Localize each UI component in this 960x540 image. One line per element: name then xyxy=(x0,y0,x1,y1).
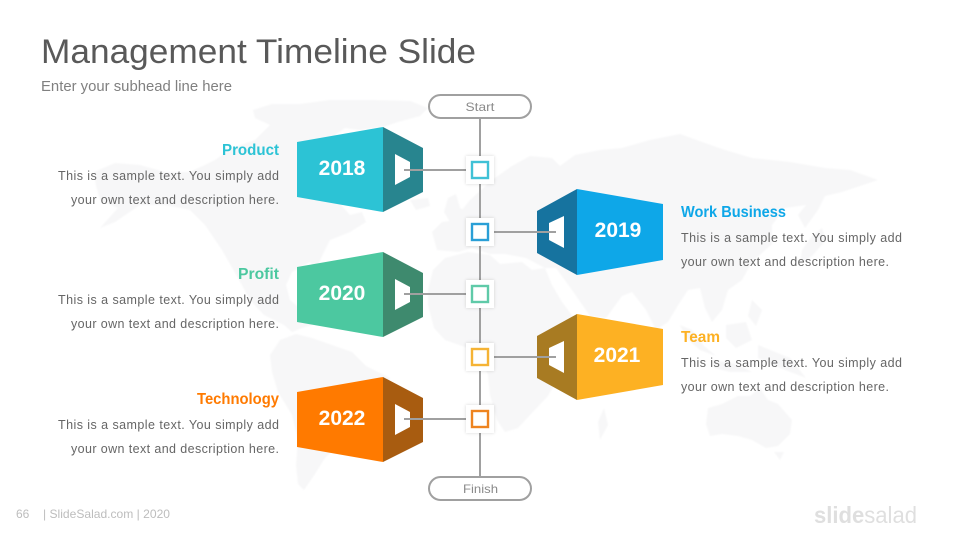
marker 2020 xyxy=(466,280,494,308)
finish pill xyxy=(429,477,531,500)
connector 2019 xyxy=(494,231,556,233)
text: Work Business: This is a sample text. You simply add xyxy=(681,231,902,245)
block 2020 xyxy=(297,252,423,337)
marker 2021 xyxy=(466,343,494,371)
text: Work Business: your own text and description here. xyxy=(681,255,889,269)
text: Profit: This is a sample text. You simply add xyxy=(58,293,279,307)
start pill: Start xyxy=(466,100,495,114)
text: Profit xyxy=(58,266,279,331)
text: Team xyxy=(681,329,902,394)
block 2022: 2022 xyxy=(319,407,365,430)
text: Team: This is a sample text. You simply add xyxy=(681,356,902,370)
text: Technology: This is a sample text. You simply add xyxy=(58,418,279,432)
subhead: Enter your subhead line here xyxy=(41,78,232,95)
marker 2019 xyxy=(466,218,494,246)
connector 2018 xyxy=(404,169,466,171)
title: Management Timeline Slide xyxy=(41,33,476,71)
milestone 2020: Profit xyxy=(58,252,494,337)
block 2021 xyxy=(537,314,663,400)
block 2019 xyxy=(537,189,663,275)
text: Team: your own text and description here. xyxy=(681,380,889,394)
footer page number and credit: 66 xyxy=(16,507,30,521)
marker 2022 xyxy=(466,405,494,433)
text: Technology xyxy=(58,391,279,456)
connector 2021 xyxy=(494,356,556,358)
connector 2020 xyxy=(404,293,466,295)
text: Profit: your own text and description here. xyxy=(71,317,279,331)
finish pill: Finish xyxy=(463,482,498,496)
text: Product: This is a sample text. You simply add xyxy=(58,169,279,183)
milestone 2018: Product xyxy=(58,127,494,212)
text: Team: Team xyxy=(681,329,720,346)
start pill xyxy=(429,95,531,118)
timeline spine xyxy=(479,118,481,476)
text: Work Business xyxy=(681,204,902,269)
text: Profit: Profit xyxy=(238,266,279,283)
block 2019: 2019 xyxy=(595,219,641,242)
text: Product: your own text and description here. xyxy=(71,193,279,207)
footer page number and credit: | SlideSalad.com | 2020 xyxy=(43,507,170,521)
marker 2018 xyxy=(466,156,494,184)
block 2021: 2021 xyxy=(594,344,641,367)
world map background xyxy=(94,100,878,490)
block 2022 xyxy=(297,377,423,462)
brand logo: slidesalad xyxy=(814,502,917,528)
block 2018: 2018 xyxy=(319,157,366,180)
text: Product: Product xyxy=(222,142,279,159)
text: Product xyxy=(58,142,279,207)
connector 2022 xyxy=(404,418,466,420)
milestone 2021: Team xyxy=(466,314,902,400)
text: Work Business: Work Business xyxy=(681,204,786,221)
block 2020: 2020 xyxy=(319,282,365,305)
milestone 2022: Technology xyxy=(58,377,494,462)
text: Technology: your own text and description here. xyxy=(71,442,279,456)
block 2018 xyxy=(297,127,423,212)
text: Technology: Technology xyxy=(197,391,279,408)
milestone 2019: Work Business xyxy=(466,189,902,275)
